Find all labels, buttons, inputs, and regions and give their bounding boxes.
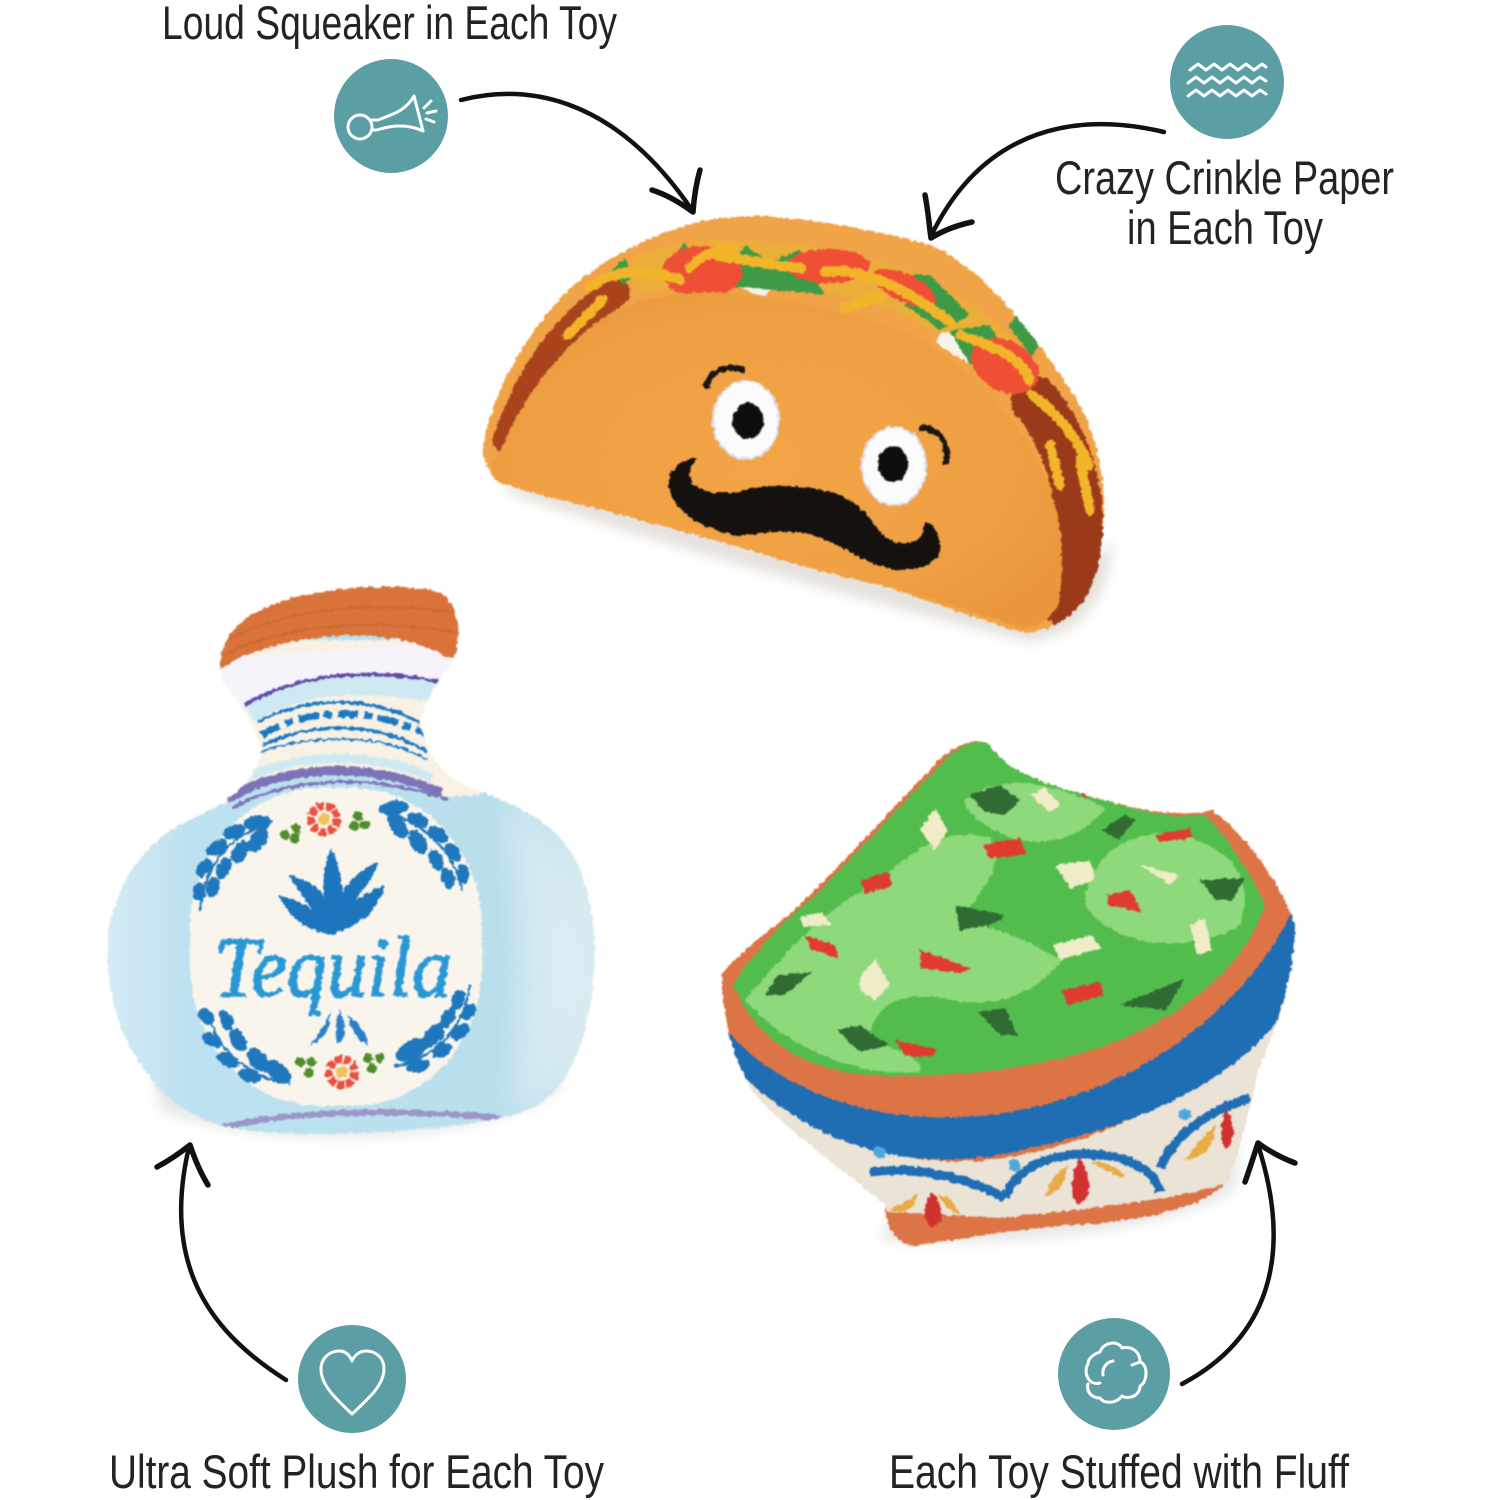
taco eyes (713, 381, 926, 505)
label panel (190, 788, 482, 1106)
arrow: squeaker to taco (461, 94, 700, 212)
bottom purple band (220, 1112, 500, 1128)
bottle body (106, 633, 596, 1136)
taco mustache (668, 458, 940, 570)
heading: ultra soft plush: Ultra Soft Plush for Each Toy (109, 1445, 604, 1498)
script word: Tequila: Tequila (214, 919, 452, 1015)
arrow: plush to bottle (157, 1145, 286, 1380)
small leaves under word (310, 1010, 368, 1045)
bottle neck (200, 640, 480, 805)
toy: taco (484, 216, 1112, 642)
taco filling band (508, 262, 1079, 605)
bottom right wreath (394, 985, 477, 1073)
purple band (226, 771, 442, 800)
bowl ceramic stripe (746, 1022, 1277, 1219)
heading: each toy stuffed with fluff: Each Toy Stuffed with Fluff (889, 1445, 1350, 1498)
white band under cap (220, 643, 453, 707)
light green patches (745, 783, 1245, 1073)
cream flecks (800, 788, 1212, 1000)
callout: crinkle paper (1055, 25, 1394, 254)
bottle top cap (218, 584, 460, 670)
arrow: crinkle to taco (925, 124, 1164, 238)
bottom left wreath (197, 1007, 293, 1086)
blue rim band (722, 895, 1300, 1159)
top right wreath (380, 800, 468, 890)
heading: crazy crinkle paper: Crazy Crinkle Paper (1055, 151, 1394, 204)
agave plant (279, 848, 385, 935)
bowl base (720, 740, 1296, 1248)
toy: tequila bottle (100, 570, 610, 1140)
blue arches (870, 1098, 1250, 1198)
arch petals (874, 1108, 1233, 1228)
icon: heart (298, 1325, 406, 1433)
bottom flower (295, 1053, 385, 1085)
toy: guacamole bowl (720, 740, 1297, 1248)
pale blue neck stripe (245, 676, 442, 722)
dark green flecks (765, 785, 1245, 1052)
callout: ultra soft plush (109, 1325, 604, 1498)
blue neck pattern (258, 702, 425, 725)
top left wreath (194, 816, 271, 912)
guacamole surface (733, 742, 1265, 1076)
callout: stuffed with fluff (889, 1318, 1350, 1498)
icon: horn (334, 59, 448, 173)
heading: crazy crinkle paper: in Each Toy (1127, 201, 1323, 254)
arrow: fluff to bowl (1182, 1143, 1295, 1384)
icon: fluff cloud (1058, 1318, 1170, 1430)
icon: waves (1170, 25, 1284, 139)
callout: loud squeaker (162, 0, 617, 173)
top flower (280, 806, 370, 843)
red flecks (805, 775, 1192, 1057)
taco brows (706, 368, 947, 462)
taco front shell (492, 292, 1062, 628)
